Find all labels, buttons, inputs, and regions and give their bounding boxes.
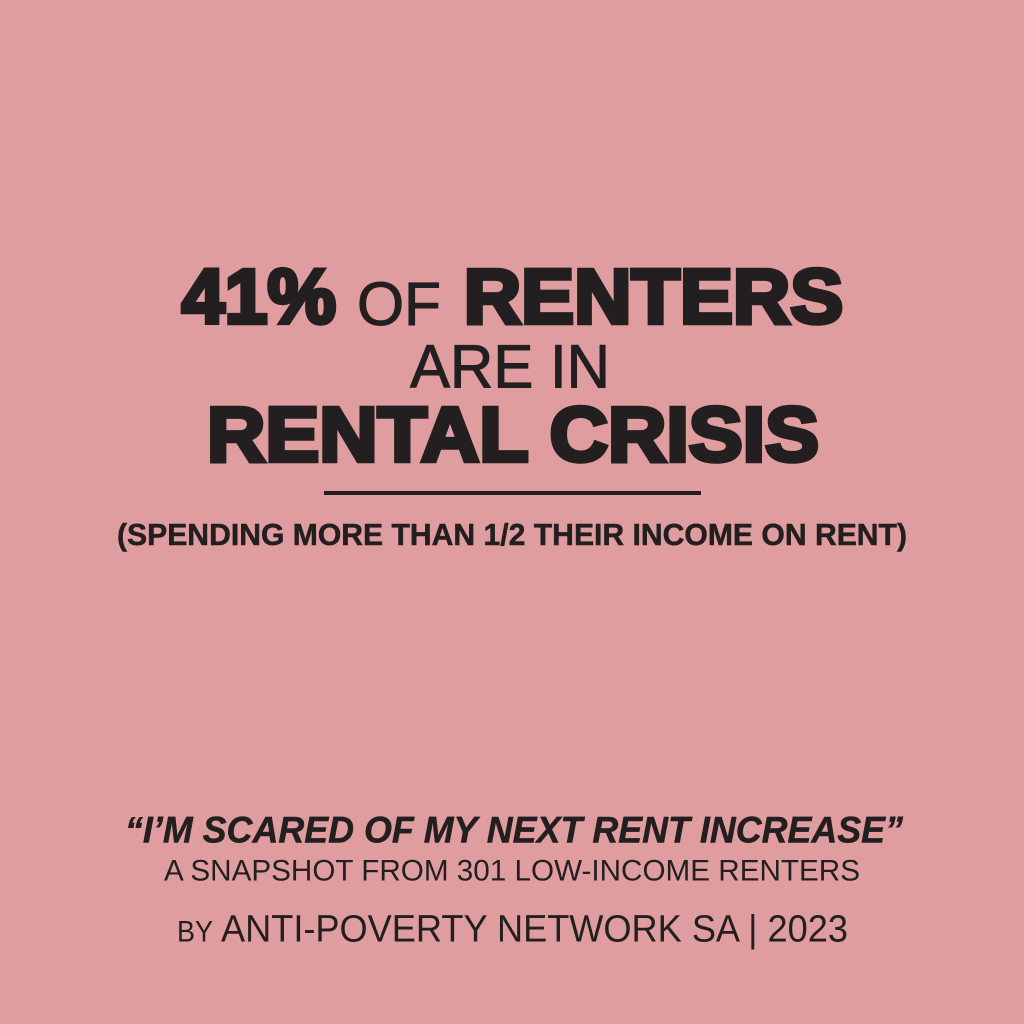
headline line 3: RENTAL CRISIS — [207, 392, 819, 478]
report subtitle: A SNAPSHOT FROM 301 LOW-INCOME RENTERS — [164, 854, 860, 888]
headline line 1: OF — [357, 270, 441, 338]
attribution: BY — [177, 916, 213, 949]
headline line 1 — [182, 254, 843, 340]
headline line 2: ARE IN — [410, 332, 610, 400]
attribution: ANTI-POVERTY NETWORK SA | 2023 — [221, 909, 848, 951]
divider rule — [324, 491, 701, 495]
headline — [182, 254, 843, 478]
headline line 1: 41% — [182, 254, 336, 340]
report quote title: “I’M SCARED OF MY NEXT RENT INCREASE” — [125, 810, 903, 850]
definition note: (SPENDING MORE THAN 1/2 THEIR INCOME ON RENT) — [117, 517, 907, 552]
headline line 1: RENTERS — [464, 254, 843, 340]
